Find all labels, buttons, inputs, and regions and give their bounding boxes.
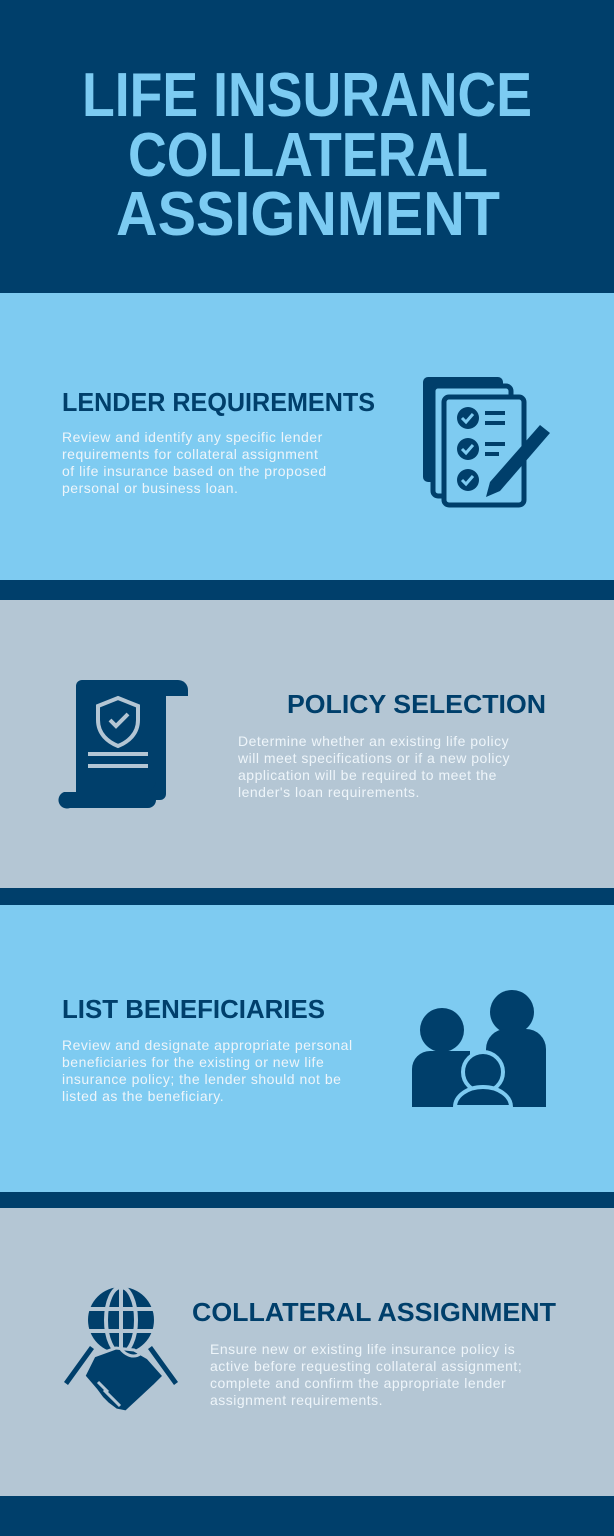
- panel: list beneficiaries: [0, 905, 614, 1192]
- text: collateral assignment: complete and confirm the appropriate lender: [210, 1375, 506, 1391]
- text: list beneficiaries: listed as the beneficiary.: [62, 1088, 224, 1104]
- text: lender requirements: [62, 429, 327, 496]
- heading: lender requirements: LENDER REQUIREMENTS: [62, 387, 375, 417]
- title: [82, 61, 532, 249]
- text: policy selection: application will be required to meet the: [238, 767, 497, 783]
- text: list beneficiaries: [62, 1037, 353, 1104]
- text: lender requirements: Review and identify any specific lender: [62, 429, 323, 445]
- icon: policy scroll: [58, 680, 188, 809]
- heading: policy selection: POLICY SELECTION: [287, 689, 546, 719]
- text: collateral assignment: active before requesting collateral assignment;: [210, 1358, 522, 1374]
- text: list beneficiaries: beneficiaries for the existing or new life: [62, 1054, 324, 1070]
- text: policy selection: lender's loan requirements.: [238, 784, 420, 800]
- text: policy selection: Determine whether an existing life policy: [238, 733, 509, 749]
- panel: policy selection: [0, 600, 614, 888]
- title: ASSIGNMENT: [116, 180, 500, 249]
- text: collateral assignment: [210, 1341, 522, 1408]
- text: list beneficiaries: insurance policy; the lender should not be: [62, 1071, 341, 1087]
- text: lender requirements: of life insurance based on the proposed: [62, 463, 327, 479]
- icon: globe handshake: [64, 1287, 178, 1412]
- text: collateral assignment: Ensure new or existing life insurance policy is: [210, 1341, 515, 1357]
- text: lender requirements: personal or business loan.: [62, 480, 238, 496]
- title: COLLATERAL: [128, 121, 488, 190]
- heading: list beneficiaries: LIST BENEFICIARIES: [62, 994, 325, 1024]
- text: policy selection: will meet specifications or if a new policy: [237, 750, 510, 766]
- panel: lender requirements: [0, 293, 614, 580]
- text: list beneficiaries: Review and designate appropriate personal: [62, 1037, 353, 1053]
- icon: family: [412, 990, 546, 1107]
- heading: collateral assignment: COLLATERAL ASSIGNMENT: [192, 1297, 556, 1327]
- text: lender requirements: requirements for collateral assignment: [62, 446, 318, 462]
- text: policy selection: [237, 733, 510, 800]
- title: LIFE INSURANCE: [82, 61, 532, 130]
- panel: collateral assignment: [0, 1208, 614, 1496]
- text: collateral assignment: assignment requirements.: [210, 1392, 383, 1408]
- icon: checklist: [423, 377, 550, 505]
